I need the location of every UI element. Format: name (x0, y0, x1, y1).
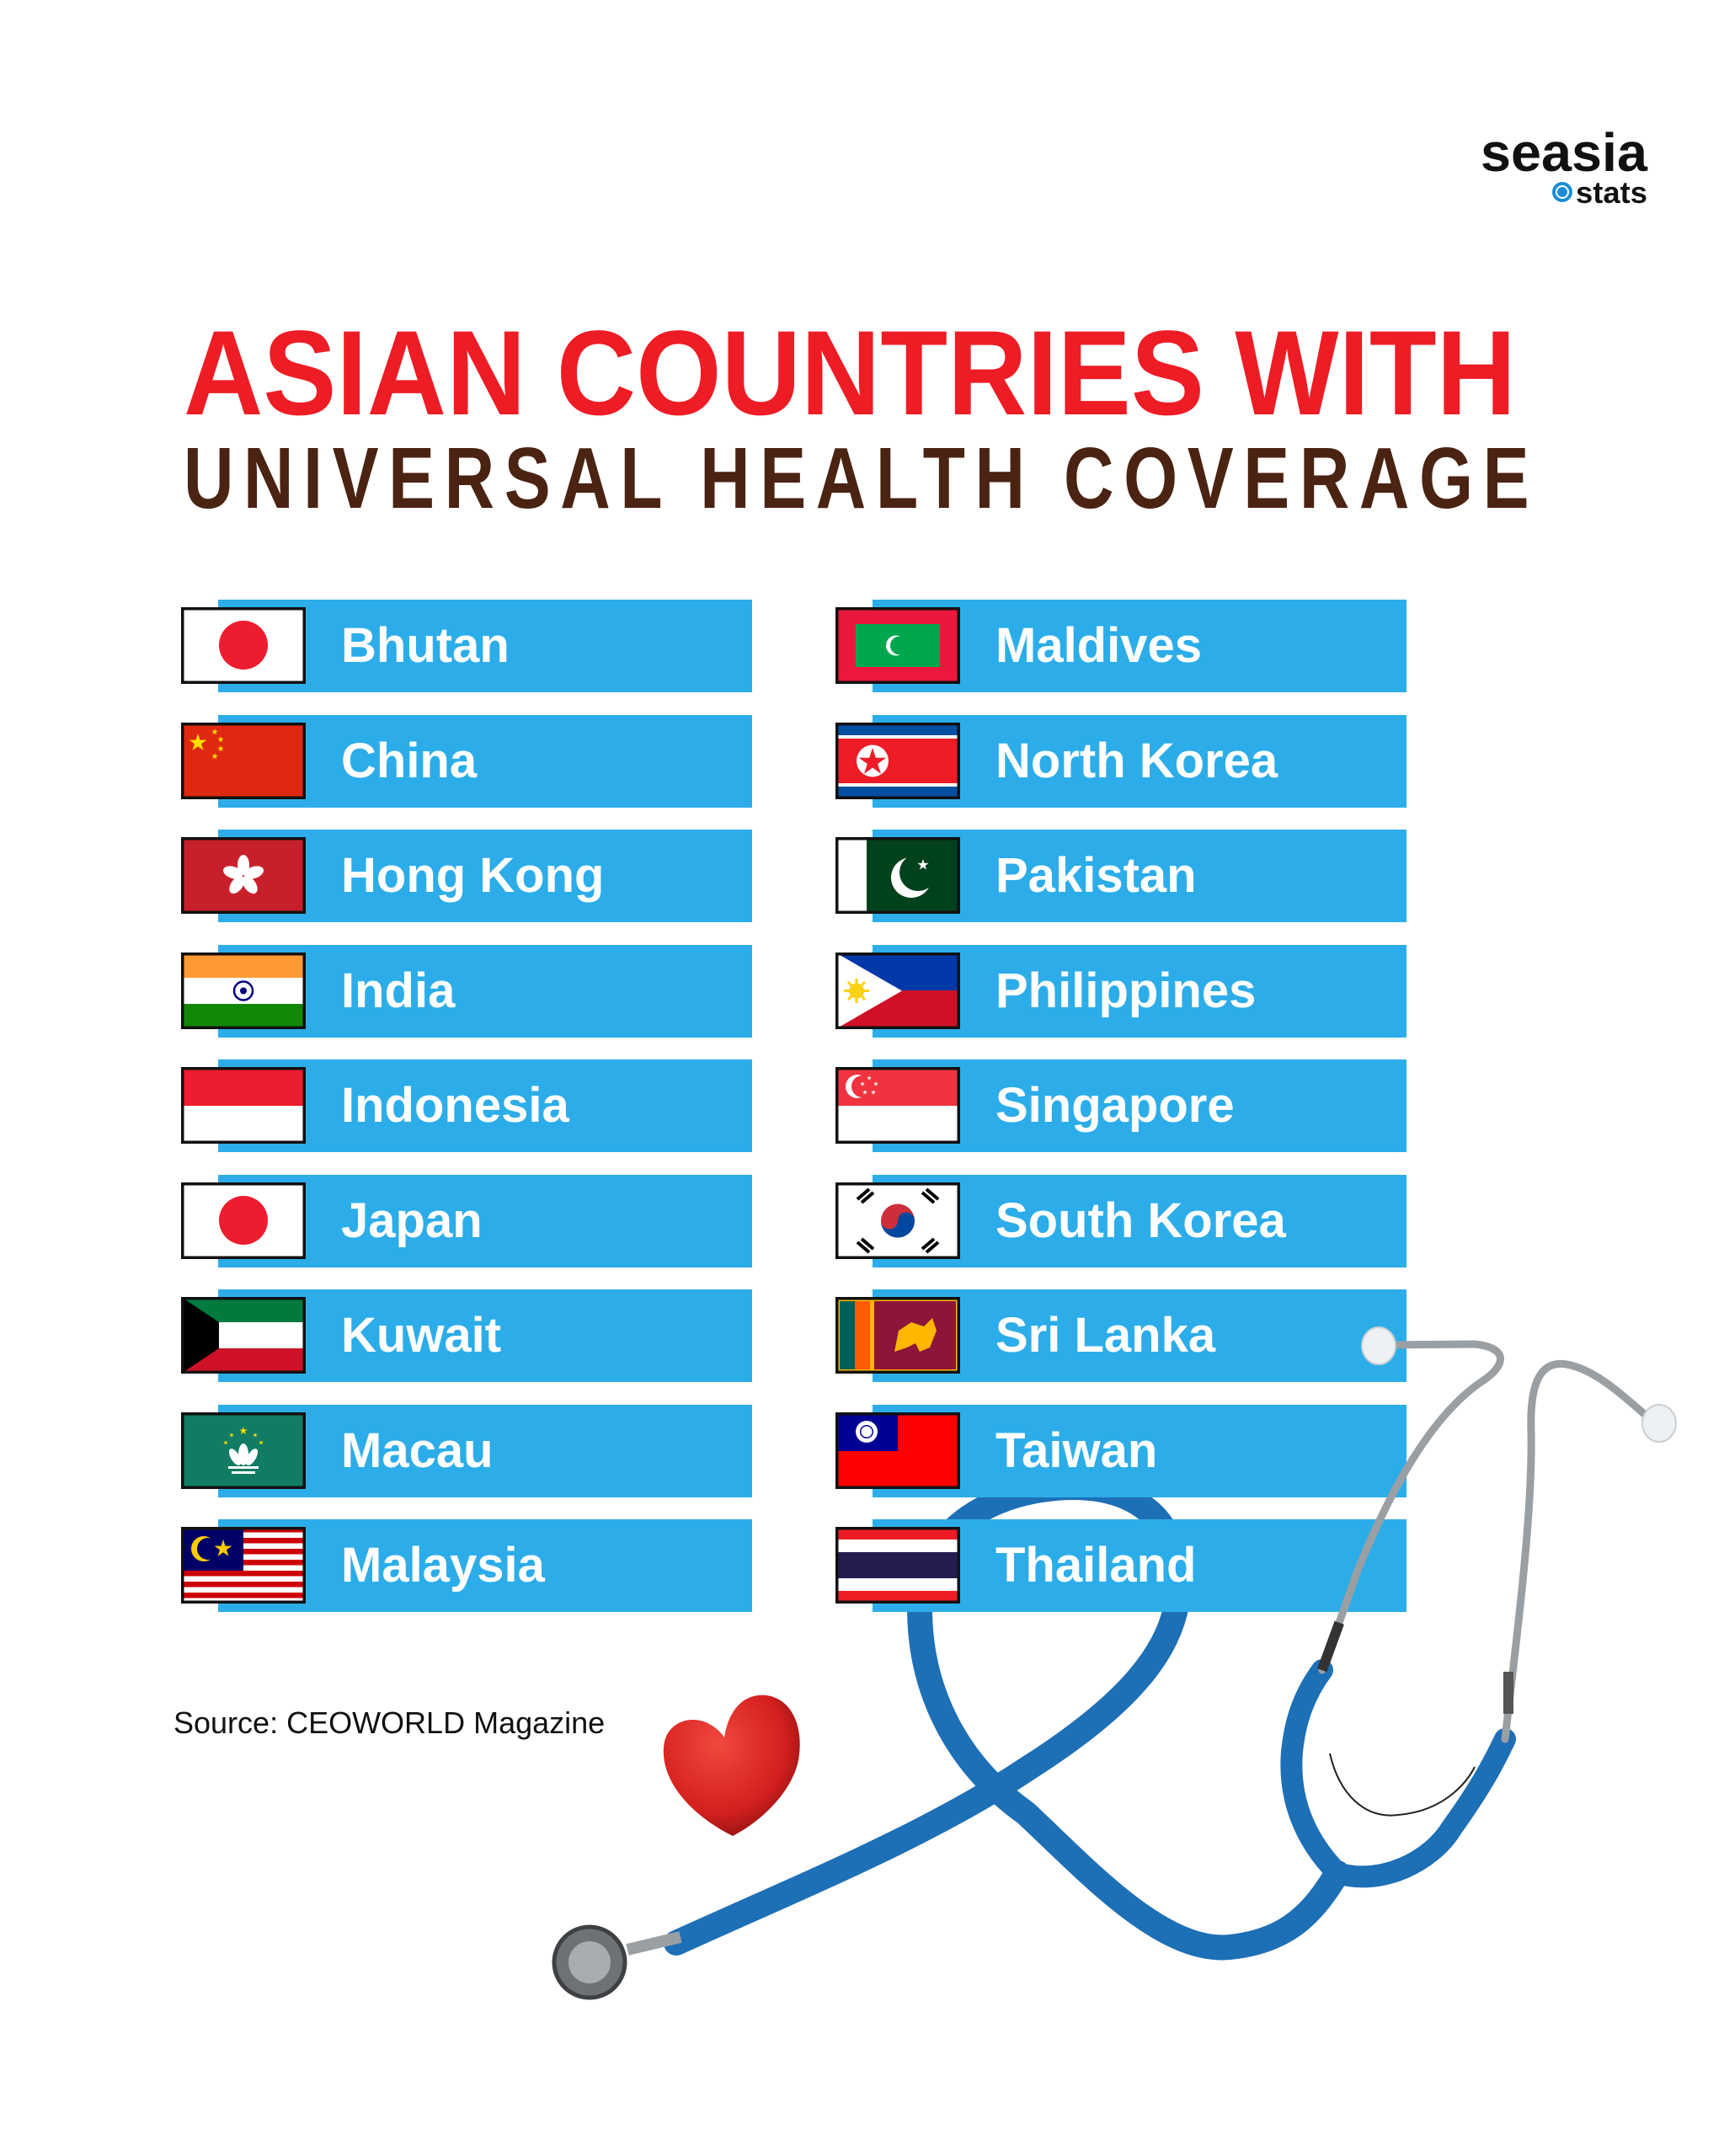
row: Macau: Macau (341, 1423, 494, 1477)
logo: stats (1576, 175, 1647, 209)
row: Macau (181, 1405, 752, 1497)
row: Taiwan (835, 1405, 1406, 1497)
row: Maldives (835, 600, 1406, 692)
logo (1481, 125, 1647, 209)
row: Japan: Japan (341, 1193, 483, 1248)
row: Malaysia (181, 1519, 752, 1612)
row: Hong Kong (181, 830, 752, 922)
row: South Korea: South Korea (995, 1193, 1286, 1248)
row: Pakistan (835, 830, 1406, 922)
list: right column (835, 600, 1406, 1612)
row: Taiwan: Taiwan (995, 1423, 1157, 1477)
row: China (181, 715, 752, 808)
list: left column (181, 600, 752, 1612)
row: Indonesia (181, 1059, 752, 1152)
row: Kuwait: Kuwait (341, 1308, 501, 1363)
row: Thailand: Thailand (995, 1538, 1196, 1593)
source: Source: CEOWORLD Magazine (173, 1705, 605, 1740)
row: Philippines (835, 945, 1406, 1038)
row: India (181, 945, 752, 1038)
row: Kuwait (181, 1289, 752, 1382)
row: Sri Lanka: Sri Lanka (995, 1308, 1215, 1363)
title (184, 312, 1529, 522)
row: Thailand (835, 1519, 1406, 1612)
row: Japan (181, 1175, 752, 1267)
row: China: China (341, 733, 477, 788)
row: South Korea (835, 1175, 1406, 1267)
row: Philippines: Philippines (995, 963, 1256, 1017)
icon: heart (664, 1694, 800, 1836)
row: Bhutan: Bhutan (341, 618, 510, 673)
row: Singapore: Singapore (995, 1078, 1235, 1133)
row: North Korea: North Korea (995, 733, 1278, 788)
row: Malaysia: Malaysia (341, 1538, 545, 1593)
row: India: India (341, 963, 455, 1017)
row: Maldives: Maldives (995, 618, 1202, 673)
row: Singapore (835, 1059, 1406, 1152)
row: Sri Lanka (835, 1289, 1406, 1382)
row: Bhutan (181, 600, 752, 692)
row: North Korea (835, 715, 1406, 808)
row: Hong Kong: Hong Kong (341, 848, 604, 903)
row: Pakistan: Pakistan (995, 848, 1197, 903)
row: Indonesia: Indonesia (341, 1078, 569, 1133)
